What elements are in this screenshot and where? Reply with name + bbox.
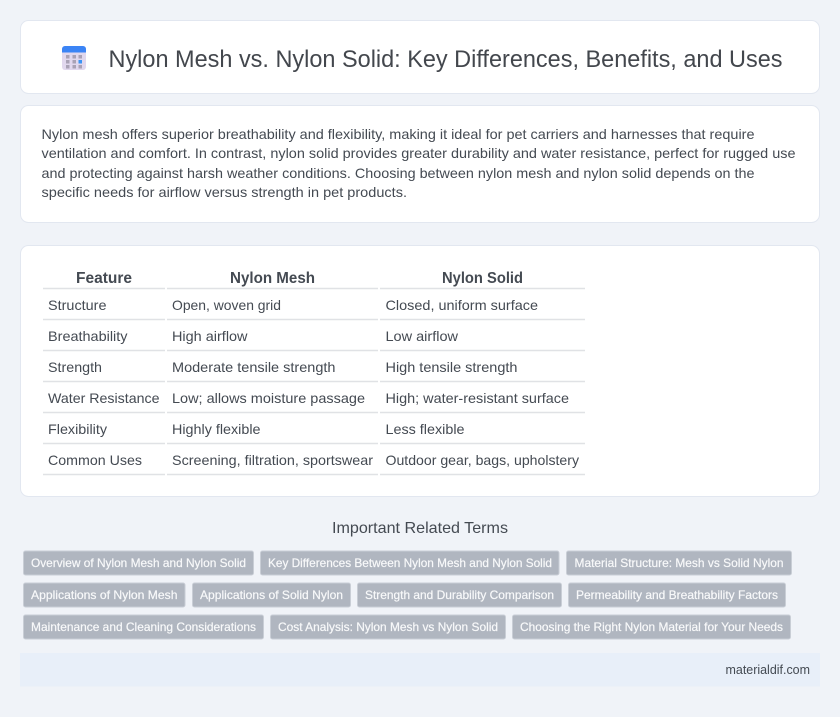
table row: common uses: Screening, filtration, sportswear (172, 452, 373, 468)
table header row: Nylon Mesh (230, 270, 315, 287)
table row: breathability: Low airflow (386, 328, 459, 344)
text block: intro: Nylon mesh offers superior breathability and flexibility, making it ideal for pet carriers and harnesses that require (42, 126, 755, 142)
text block: intro: ventilation and comfort. In contrast, nylon solid provides greater durability and water resistance, perfect for rugged use (42, 145, 796, 161)
tag (358, 583, 562, 607)
tag (568, 583, 786, 607)
table row: breathability: High airflow (172, 328, 248, 344)
table row: strength: Strength (48, 359, 102, 375)
tag: Strength and Durability Comparison (365, 588, 554, 602)
heading: related terms: Important Related Terms (332, 520, 508, 537)
table row: water resistance: Low; allows moisture passage (172, 390, 365, 406)
tag (24, 615, 264, 639)
icon: calendar (62, 46, 86, 70)
tag (512, 615, 790, 639)
tag (192, 583, 350, 607)
table row: common uses: Outdoor gear, bags, upholstery (386, 452, 579, 468)
tag: Applications of Nylon Mesh (31, 588, 178, 602)
table row: common uses (48, 452, 579, 468)
panel: comparison table (20, 246, 820, 496)
table row: flexibility: Flexibility (48, 421, 107, 437)
tag: Cost Analysis: Nylon Mesh vs Nylon Solid (278, 620, 498, 634)
panel: title header (20, 20, 820, 94)
table row: structure: Closed, uniform surface (386, 297, 538, 313)
table header row: Nylon Solid (442, 270, 523, 287)
table row: water resistance (48, 390, 569, 406)
table row: water resistance: Water Resistance (48, 390, 160, 406)
table row: breathability: Breathability (48, 328, 128, 344)
table header row (76, 270, 523, 287)
tag (270, 615, 506, 639)
table row: structure: Structure (48, 297, 107, 313)
footer bar (20, 653, 820, 686)
table row: flexibility: Highly flexible (172, 421, 261, 437)
footer source text: materialdif.com (726, 663, 810, 677)
table row: common uses: Common Uses (48, 452, 142, 468)
table row: flexibility: Less flexible (386, 421, 465, 437)
tag: Key Differences Between Nylon Mesh and Nylon Solid (268, 556, 552, 570)
text block: intro: and protecting against harsh weather conditions. Choosing between nylon mesh and nylon solid depends on the (42, 165, 755, 181)
text block: intro: specific needs for airflow versus strength in pet products. (42, 184, 407, 200)
tag (260, 551, 559, 575)
tag group: related terms (24, 551, 792, 639)
table row: strength: Moderate tensile strength (172, 359, 336, 375)
tag: Permeability and Breathability Factors (576, 588, 778, 602)
tag: Maintenance and Cleaning Considerations (31, 620, 256, 634)
tag: Choosing the Right Nylon Material for Your Needs (520, 620, 783, 634)
tag: Material Structure: Mesh vs Solid Nylon (574, 556, 784, 570)
tag (24, 583, 185, 607)
tag: Overview of Nylon Mesh and Nylon Solid (31, 556, 246, 570)
text block: intro (42, 126, 796, 200)
table row: strength: High tensile strength (386, 359, 518, 375)
table row: breathability (48, 328, 459, 344)
table row: flexibility (48, 421, 465, 437)
table row: structure: Open, woven grid (172, 297, 281, 313)
tag (24, 551, 254, 575)
tag: Applications of Solid Nylon (200, 588, 343, 602)
table row: structure (48, 297, 538, 313)
panel: intro paragraph (20, 106, 820, 222)
table row: water resistance: High; water-resistant surface (386, 390, 569, 406)
tag (566, 551, 792, 575)
table row: strength (48, 359, 518, 375)
title: Nylon Mesh vs. Nylon Solid: Key Differences, Benefits, and Uses (108, 46, 783, 73)
table header row: Feature (76, 270, 132, 287)
